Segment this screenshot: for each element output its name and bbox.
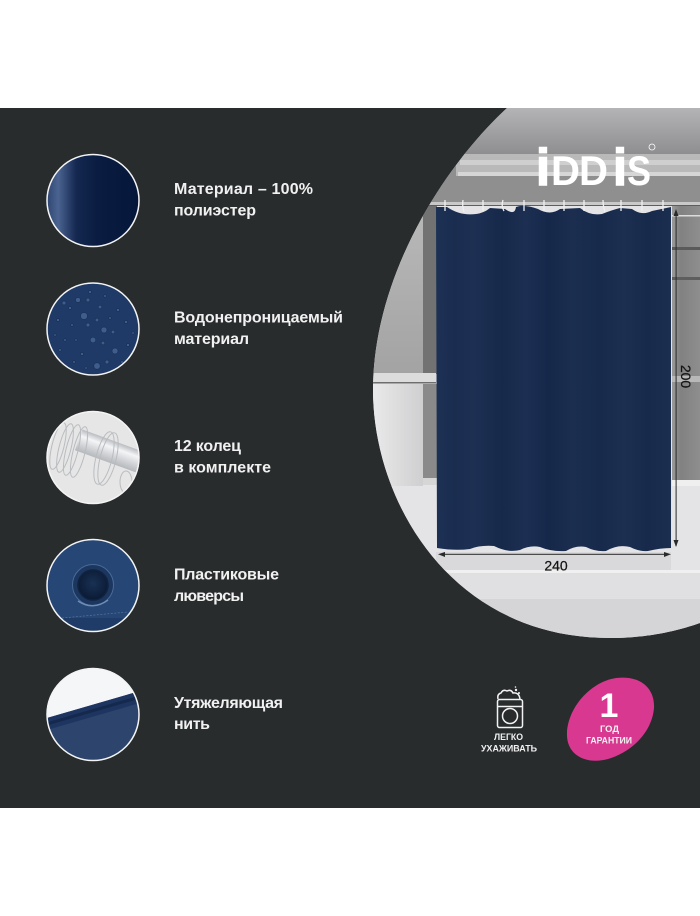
feature 3 text: 12 колец [174, 438, 241, 455]
feature 1 text: Материал – 100% [174, 181, 313, 198]
feature 3 text: в комплекте [174, 460, 271, 476]
logo: iDDiS: D [551, 147, 580, 194]
feature 4 text: Пластиковые [174, 566, 279, 584]
feature 4 text: люверсы [174, 588, 244, 605]
feature 3: rings on rod [46, 411, 150, 505]
dark background panel [0, 108, 700, 808]
warranty badge: 1 [600, 687, 618, 725]
feature 2 text: Водонепроницаемый [174, 310, 343, 326]
logo: iDDiS: D [579, 147, 608, 194]
feature 3 text [174, 438, 271, 476]
feature 4: plastic grommet [46, 539, 140, 634]
icon: washing machine [498, 686, 522, 728]
feature 2: water drops swatch [46, 282, 140, 376]
feature 5 text: нить [174, 716, 210, 733]
shower rod [428, 202, 700, 206]
width dimension arrow [438, 552, 671, 557]
feature 1 text: полиэстер [174, 202, 256, 220]
feature 1 text [174, 181, 313, 220]
feature 5 text: Утяжеляющая [174, 695, 283, 712]
feature 5 text [174, 695, 283, 733]
feature 2 text: материал [174, 331, 249, 348]
warranty badge: ГАРАНТИИ [586, 736, 632, 746]
feature 1: material swatch [46, 154, 140, 248]
easy care label: УХАЖИВАТЬ [481, 744, 537, 754]
curtain rings [445, 200, 663, 212]
curtain [436, 206, 671, 551]
easy care label [481, 732, 537, 754]
warranty badge: ГОД [600, 724, 619, 735]
logo: iDDiS [536, 139, 655, 197]
logo: iDDiS: i [536, 139, 550, 197]
easy care label: ЛЕГКО [494, 732, 523, 743]
height label: 200 [678, 365, 694, 388]
feature 2 text [174, 310, 343, 348]
height dimension arrow [674, 209, 678, 547]
feature 4 text [174, 566, 279, 605]
warranty badge [567, 678, 654, 761]
logo: iDDiS: S [627, 147, 651, 194]
feature 5: weighted thread hem [46, 668, 140, 762]
logo: iDDiS: i [613, 139, 627, 197]
bathroom photo [370, 108, 700, 640]
width label: 240 [544, 558, 568, 574]
